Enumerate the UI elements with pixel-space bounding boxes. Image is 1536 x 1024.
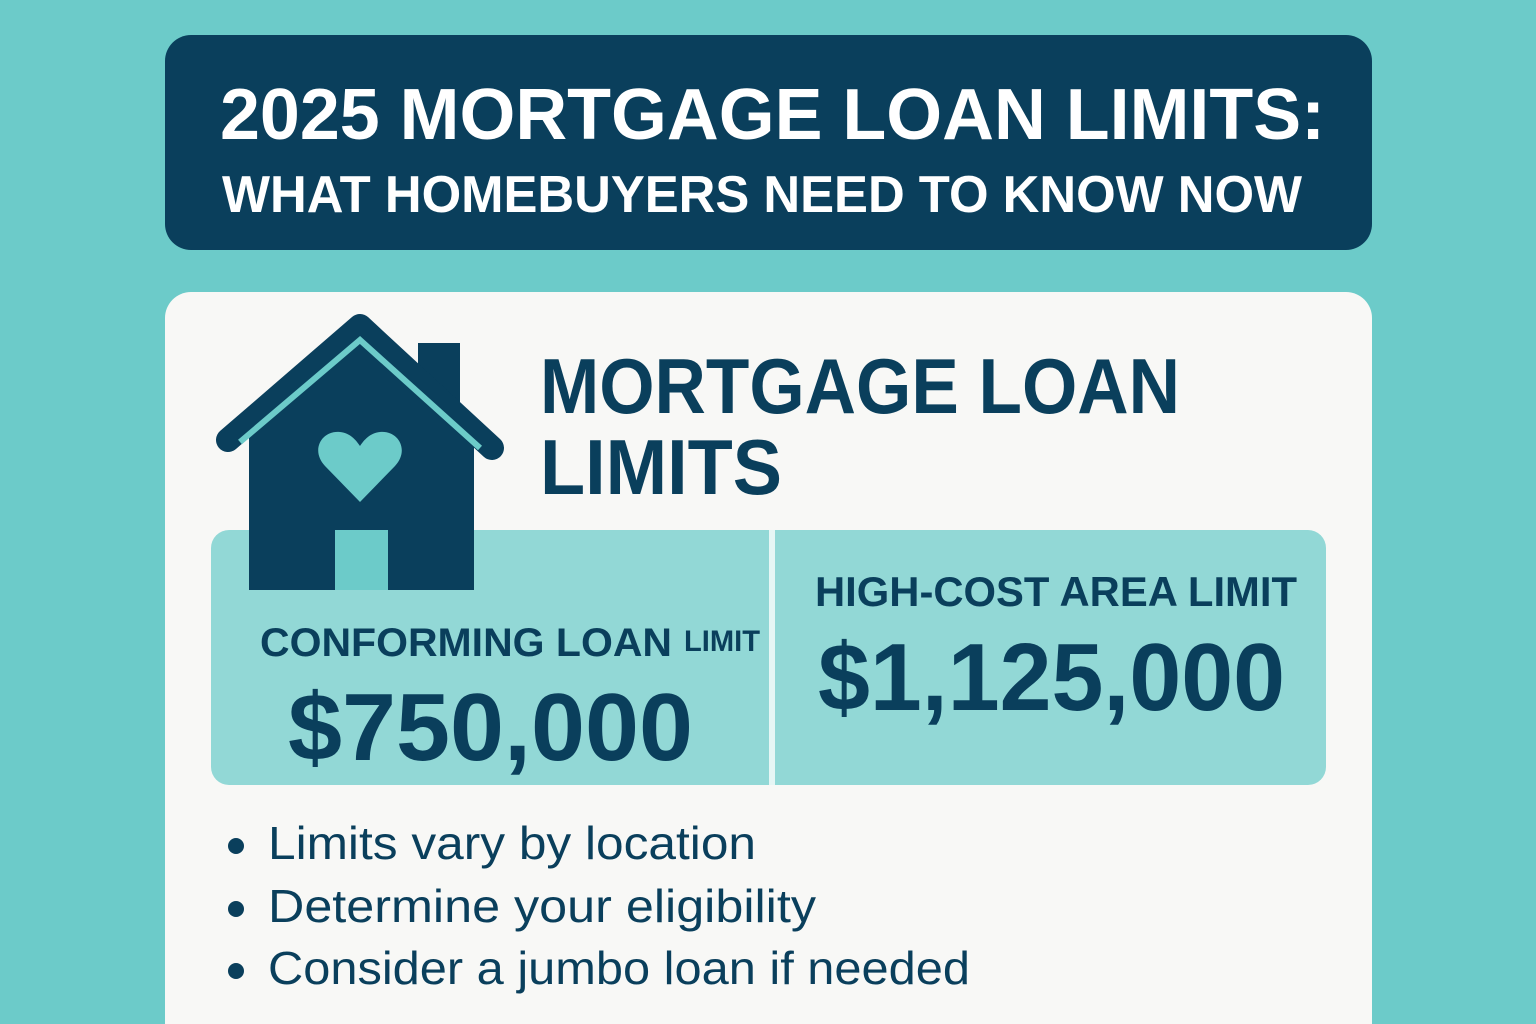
header banner [165, 35, 1372, 250]
limits box: LIMIT [684, 625, 760, 658]
conforming label: CONFORMING LOAN [260, 621, 672, 665]
bullet list: Determine your eligibility [268, 880, 816, 932]
high-cost value: $1,125,000 [818, 624, 1285, 731]
panel: main card [165, 292, 1372, 1024]
heading: LIMITS [540, 423, 782, 511]
limits box [211, 530, 1326, 785]
high-cost label: HIGH-COST AREA LIMIT [815, 568, 1297, 615]
icon: house [228, 326, 492, 590]
bullet list [228, 817, 970, 994]
subtitle: WHAT HOMEBUYERS NEED TO KNOW NOW [222, 166, 1303, 224]
bullet list: Consider a jumbo loan if needed [268, 942, 970, 994]
conforming value: $750,000 [288, 674, 693, 781]
title: 2025 MORTGAGE LOAN LIMITS: [220, 75, 1325, 155]
heading [540, 342, 1180, 511]
heading: MORTGAGE LOAN [540, 342, 1180, 430]
bullet list: Limits vary by location [268, 817, 756, 869]
